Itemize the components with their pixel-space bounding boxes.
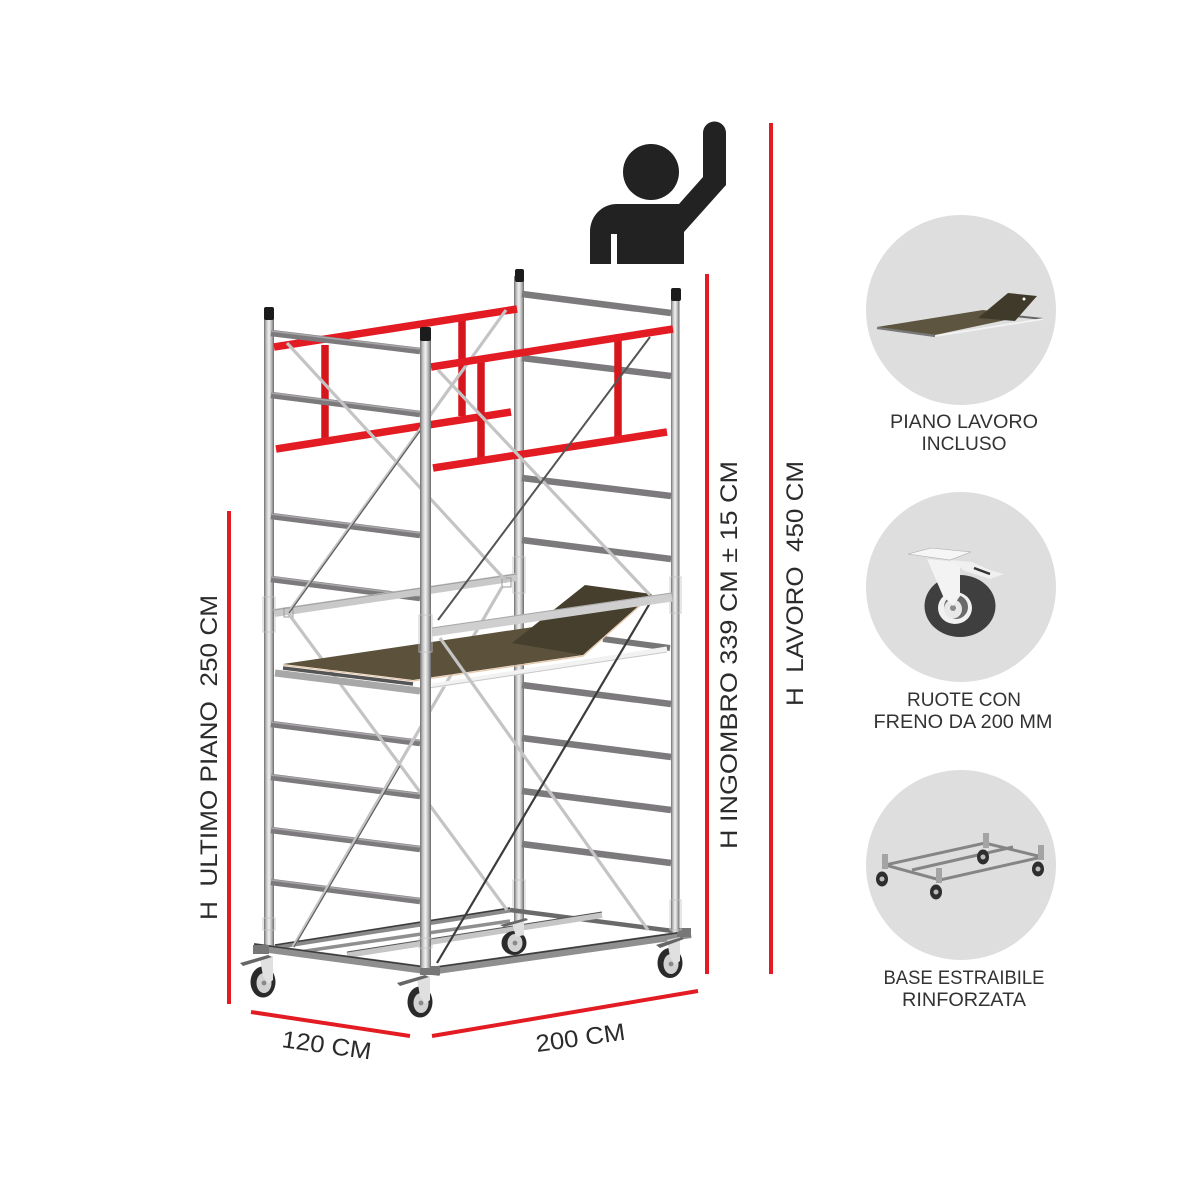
- front middle upright: [419, 327, 432, 968]
- icon: wheeled base frame: [876, 833, 1044, 900]
- dimension: top platform height line and label: H ULTIMO PIANO 250 CM: [196, 595, 223, 920]
- dimension: length 200 cm: [432, 991, 698, 1058]
- circle background: [866, 215, 1056, 405]
- wheel: front middle: [397, 975, 432, 1018]
- icon: braked castor: [908, 548, 1004, 637]
- scaffold tower: [240, 269, 691, 1018]
- rear platform rail: [603, 639, 670, 648]
- dimension: overall height line and label: H INGOMBRO 339 CM ± 15 CM: [716, 461, 743, 849]
- wheel: back middle: [500, 918, 528, 955]
- dimension: working height line and label: H LAVORO 450 CM: [782, 461, 809, 706]
- panel: work platform feature: [866, 215, 1056, 455]
- label: BASE ESTRAIBILE: [884, 968, 1044, 989]
- platform deck: [275, 585, 670, 691]
- rungs: right end frame: [522, 294, 671, 863]
- back uprights: [263, 269, 525, 950]
- base frame: [253, 908, 691, 975]
- wheel: front right: [656, 937, 684, 978]
- circle background: [866, 770, 1056, 960]
- panel: castor wheels feature: FRENO DA 200 MM: [874, 712, 1052, 733]
- dimension: length 200 cm: 200 CM: [534, 1019, 627, 1058]
- panel: extractable base feature: RINFORZATA: [902, 990, 1026, 1011]
- dimension: width 120 cm: [251, 1012, 410, 1065]
- red guard rail: front side: [431, 329, 673, 468]
- red guard rail: back side: [274, 309, 517, 449]
- deck board: [283, 622, 600, 680]
- front uprights: [670, 288, 681, 932]
- panel: work platform feature: INCLUSO: [922, 434, 1006, 455]
- wheel: back left: [240, 955, 276, 998]
- panel: extractable base feature: [866, 770, 1056, 1011]
- dimension: width 120 cm: 120 CM: [280, 1026, 373, 1065]
- panel: castor wheels feature: [866, 492, 1056, 733]
- circle background: [866, 492, 1056, 682]
- label: PIANO LAVORO: [890, 412, 1038, 433]
- icon: person raising hand: [590, 122, 726, 264]
- cross braces: left: [287, 310, 507, 947]
- castor wheels: [240, 918, 684, 1018]
- horizontal bar: front side: [432, 593, 672, 632]
- cross braces: right: [437, 337, 650, 963]
- side rail: [432, 649, 667, 686]
- label: RUOTE CON: [907, 690, 1021, 711]
- icon: platform board: [877, 293, 1043, 336]
- hinged hatch: [512, 585, 652, 655]
- rungs: left end frame: [271, 331, 420, 901]
- horizontal bar: back side: [274, 574, 517, 617]
- end rail: [275, 673, 420, 691]
